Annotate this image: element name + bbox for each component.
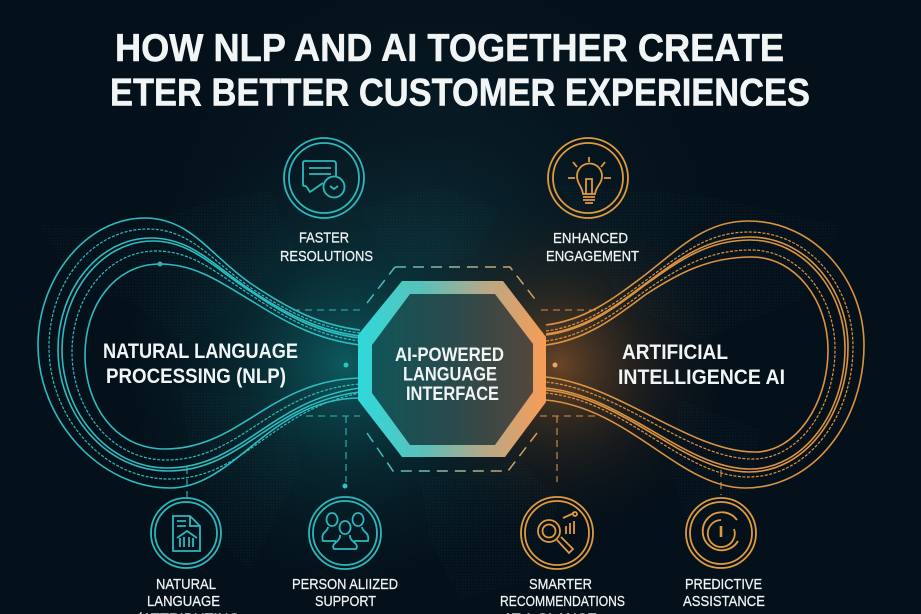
icon: magnifier with chart, smarter recommendations — [521, 497, 593, 569]
title: ETER BETTER CUSTOMER EXPERIENCES — [110, 72, 810, 114]
NLP label — [103, 340, 298, 388]
smarter recommendations label: SMARTER — [529, 577, 592, 593]
central label: LANGUAGE — [403, 364, 497, 386]
enhanced engagement label: ENHANCED — [553, 231, 628, 247]
natural language label — [137, 577, 240, 614]
icon: chat bubble, faster resolutions — [284, 138, 364, 218]
enhanced engagement label: ENGAGEMENT — [546, 249, 639, 265]
natural language label: NATURAL — [156, 577, 216, 593]
title — [110, 27, 810, 114]
faster resolutions label: RESOLUTIONS — [280, 249, 373, 265]
world map texture — [40, 185, 840, 600]
AI label: ARTIFICIAL — [622, 341, 728, 364]
central octagon — [358, 281, 546, 457]
central label — [395, 344, 504, 405]
dashed connectors: left — [187, 310, 362, 497]
natural language label: LANGUAGE — [147, 594, 220, 610]
enhanced engagement label — [546, 231, 639, 265]
title: HOW NLP AND AI TOGETHER CREATE — [115, 27, 784, 70]
personalized support label: PERSON ALIIZED — [292, 577, 398, 593]
faster resolutions label: FASTER — [299, 230, 349, 246]
faster resolutions label — [280, 230, 373, 265]
central label: AI-POWERED — [395, 344, 504, 366]
NLP label: NATURAL LANGUAGE — [103, 340, 298, 363]
personalized support label — [292, 577, 398, 610]
central label: INTERFACE — [406, 383, 499, 405]
right infinity loop: AI — [546, 221, 864, 488]
predictive assistance label — [683, 577, 765, 610]
dashed octagon ring — [367, 267, 538, 471]
predictive assistance label: PREDICTIVE — [685, 577, 762, 593]
predictive assistance label: ASSISTANCE — [683, 594, 765, 610]
icon: power gauge, predictive assistance — [686, 498, 756, 568]
icon: people, personalized support — [309, 497, 381, 569]
dashed connectors: right — [540, 310, 721, 495]
icon: document, natural language — [151, 498, 221, 568]
AI label — [618, 341, 785, 389]
icon: light bulb, enhanced engagement — [548, 138, 628, 218]
smarter recommendations label — [500, 577, 625, 614]
personalized support label: SUPPORT — [315, 594, 376, 610]
NLP label: PROCESSING (NLP) — [106, 365, 286, 388]
AI label: INTELLIGENCE AI — [618, 366, 785, 389]
left infinity loop: NLP — [38, 218, 360, 488]
smarter recommendations label: RECOMMENDATIONS — [500, 594, 625, 610]
